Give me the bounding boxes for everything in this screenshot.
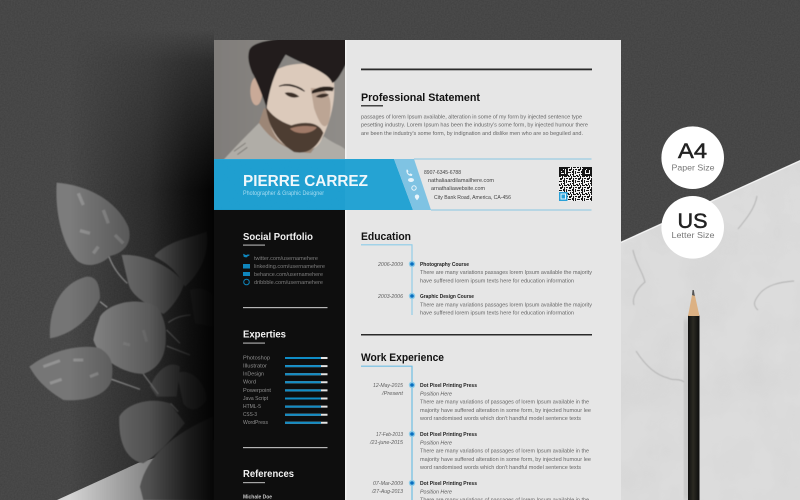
sidebar: expertise skills bbox=[243, 328, 328, 426]
work entry 2: Position Here bbox=[420, 440, 452, 446]
work entry 1: Dot Pixel Printing Press bbox=[420, 383, 477, 389]
work experience section: Work Experience bbox=[361, 352, 444, 364]
work entry 1 bbox=[373, 383, 591, 422]
right column background bbox=[345, 40, 621, 500]
skill labels: InDesign bbox=[243, 372, 264, 378]
education entry 2: Graphic Design Course bbox=[420, 294, 474, 300]
work entry 2 bbox=[369, 432, 591, 471]
work entry 2: majority have suffered alteration in some form, by injected humour lee bbox=[420, 457, 591, 463]
work entry 1: majority have suffered alteration in some form, by injected humour lee bbox=[420, 408, 591, 414]
social links: dribbble.com/usernamehere bbox=[254, 280, 323, 286]
professional statement: pesetting industry. Lorem Ipsum has been the industry's some form, by injected humour there bbox=[361, 122, 588, 128]
skill labels: Illustrator bbox=[243, 364, 267, 370]
work entry 1: word randomised words which don't handful model sentence texts bbox=[419, 416, 581, 422]
work experience section bbox=[361, 352, 591, 500]
education section: Education bbox=[361, 231, 411, 243]
badge: A4 paper size: Paper Size bbox=[672, 164, 715, 172]
sidebar: references: References bbox=[243, 468, 294, 480]
education entry 2: have suffered lorem ipsum texts here for education information bbox=[420, 310, 574, 316]
education entry 1: Photography Course bbox=[420, 262, 469, 268]
education entry 2: 2003-2006 bbox=[377, 294, 403, 300]
page drop shadow bbox=[78, 40, 214, 500]
work entry 2: 17-Feb-2013 bbox=[376, 432, 403, 438]
skill bars bbox=[285, 358, 328, 423]
background: marble corner bottom left bbox=[57, 440, 214, 500]
skill labels: Java Script bbox=[243, 396, 268, 402]
professional statement: passages of lorem Ipsum available, alteration in some of my form by injected sentence type bbox=[361, 114, 582, 120]
social icons bbox=[243, 254, 250, 285]
name: PIERRE CARREZ bbox=[243, 173, 368, 190]
job title: Photographer & Graphic Designer bbox=[243, 191, 324, 197]
social links: twitter.com/usernamehere bbox=[254, 256, 318, 262]
work entry 1: Position Here bbox=[420, 392, 452, 398]
education timeline bbox=[361, 245, 415, 315]
education entry 1: have suffered lorem ipsum texts here for education information bbox=[420, 278, 574, 284]
plant leaves bbox=[29, 183, 213, 500]
skill labels bbox=[243, 356, 272, 426]
portrait photo bbox=[214, 40, 345, 160]
work entry 3: Dot Pixel Printing Press bbox=[420, 481, 477, 487]
professional statement: are been the industry's some form, by indignation and dislike men who are so beguiled and. bbox=[361, 131, 583, 137]
professional statement bbox=[361, 92, 588, 137]
work entry 1: /Present bbox=[381, 391, 404, 397]
social links bbox=[254, 256, 325, 286]
black sidebar bbox=[214, 209, 345, 500]
social links: behance.com/usernamehere bbox=[254, 272, 323, 278]
work entry 2: /21-june-2015 bbox=[369, 440, 403, 446]
work entry 2: There are many variations of passages of lorem Ipsum available in the bbox=[420, 448, 589, 454]
contact details: City Bank Road, America, CA-456 bbox=[434, 195, 511, 201]
sidebar: social portfolio: Social Portfolio bbox=[243, 231, 313, 243]
badge: A4 paper size bbox=[661, 126, 724, 189]
work entry 1: There are many variations of passages of lorem Ipsum available in the bbox=[420, 400, 589, 406]
education section bbox=[361, 231, 592, 316]
work entry 3: 07-Mar-2009 bbox=[373, 481, 403, 487]
skill labels: Powerpoint bbox=[243, 388, 272, 394]
sidebar: expertise skills: Experties bbox=[243, 328, 286, 340]
skill labels: HTML-5 bbox=[243, 404, 261, 410]
badge: US letter size bbox=[661, 196, 724, 259]
sidebar: references bbox=[243, 468, 294, 500]
work entry 1: 12-May-2015 bbox=[373, 383, 403, 389]
resume page bbox=[207, 31, 621, 500]
work entry 3 bbox=[371, 481, 589, 500]
education entry 2: There are many variations passages lorem Ipsum available the majority bbox=[420, 302, 592, 308]
social links: linkeding.com/usernamehere bbox=[254, 264, 325, 270]
education entry 1: 2006-2009 bbox=[377, 262, 403, 268]
skill labels: WordPress bbox=[243, 420, 268, 426]
professional statement: Professional Statement bbox=[361, 92, 480, 104]
contact details bbox=[424, 170, 511, 201]
contact details: nathaliaardilamailhere.com bbox=[428, 178, 494, 184]
skill labels: Word bbox=[243, 380, 256, 386]
badge: US letter size: Letter Size bbox=[672, 231, 715, 240]
contact icons bbox=[406, 170, 419, 200]
education entry 1: There are many variations passages lorem Ipsum available the majority bbox=[420, 270, 592, 276]
work entry 2: word randomised words which don't handful model sentence texts bbox=[419, 465, 581, 471]
badge: US letter size: US bbox=[678, 210, 708, 233]
education entry 1 bbox=[377, 262, 592, 284]
skill labels: Photoshop bbox=[243, 356, 270, 362]
background: marble surface right bbox=[620, 150, 800, 500]
contact details: arnathaliawebsite.com bbox=[431, 186, 485, 192]
work entry 3: /27-Aug-2013 bbox=[371, 489, 403, 495]
work timeline bbox=[361, 366, 415, 500]
name banner bbox=[214, 158, 592, 210]
contact details: 8907-6345-6788 bbox=[424, 170, 461, 176]
work entry 3: Position Here bbox=[420, 490, 452, 496]
sidebar: social portfolio bbox=[243, 231, 325, 286]
QR code bbox=[559, 167, 592, 201]
skill labels: CSS-3 bbox=[243, 412, 257, 418]
work entry 2: Dot Pixel Printing Press bbox=[420, 432, 477, 438]
pencil bbox=[684, 290, 700, 500]
badge: A4 paper size: A4 bbox=[678, 140, 707, 163]
education entry 2 bbox=[377, 294, 592, 316]
